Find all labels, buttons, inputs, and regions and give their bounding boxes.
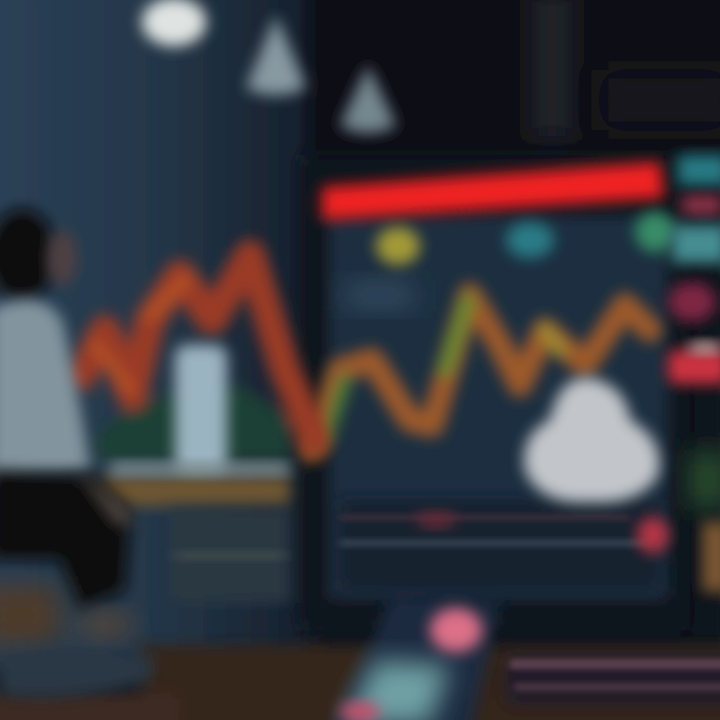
floor and cushion — [0, 585, 720, 720]
ceiling lamps — [142, 0, 396, 133]
line chart on wall — [82, 255, 315, 460]
line chart on board — [312, 295, 650, 450]
person — [0, 209, 135, 610]
white bottle — [175, 345, 227, 475]
panel: chart board — [300, 155, 685, 630]
wooden desk — [100, 462, 290, 603]
lower right table — [505, 655, 720, 705]
cloud shape — [524, 378, 659, 502]
smartphone — [330, 596, 500, 720]
red header bar — [322, 162, 664, 220]
board indicator icons — [376, 212, 675, 265]
right side tags — [668, 155, 720, 592]
